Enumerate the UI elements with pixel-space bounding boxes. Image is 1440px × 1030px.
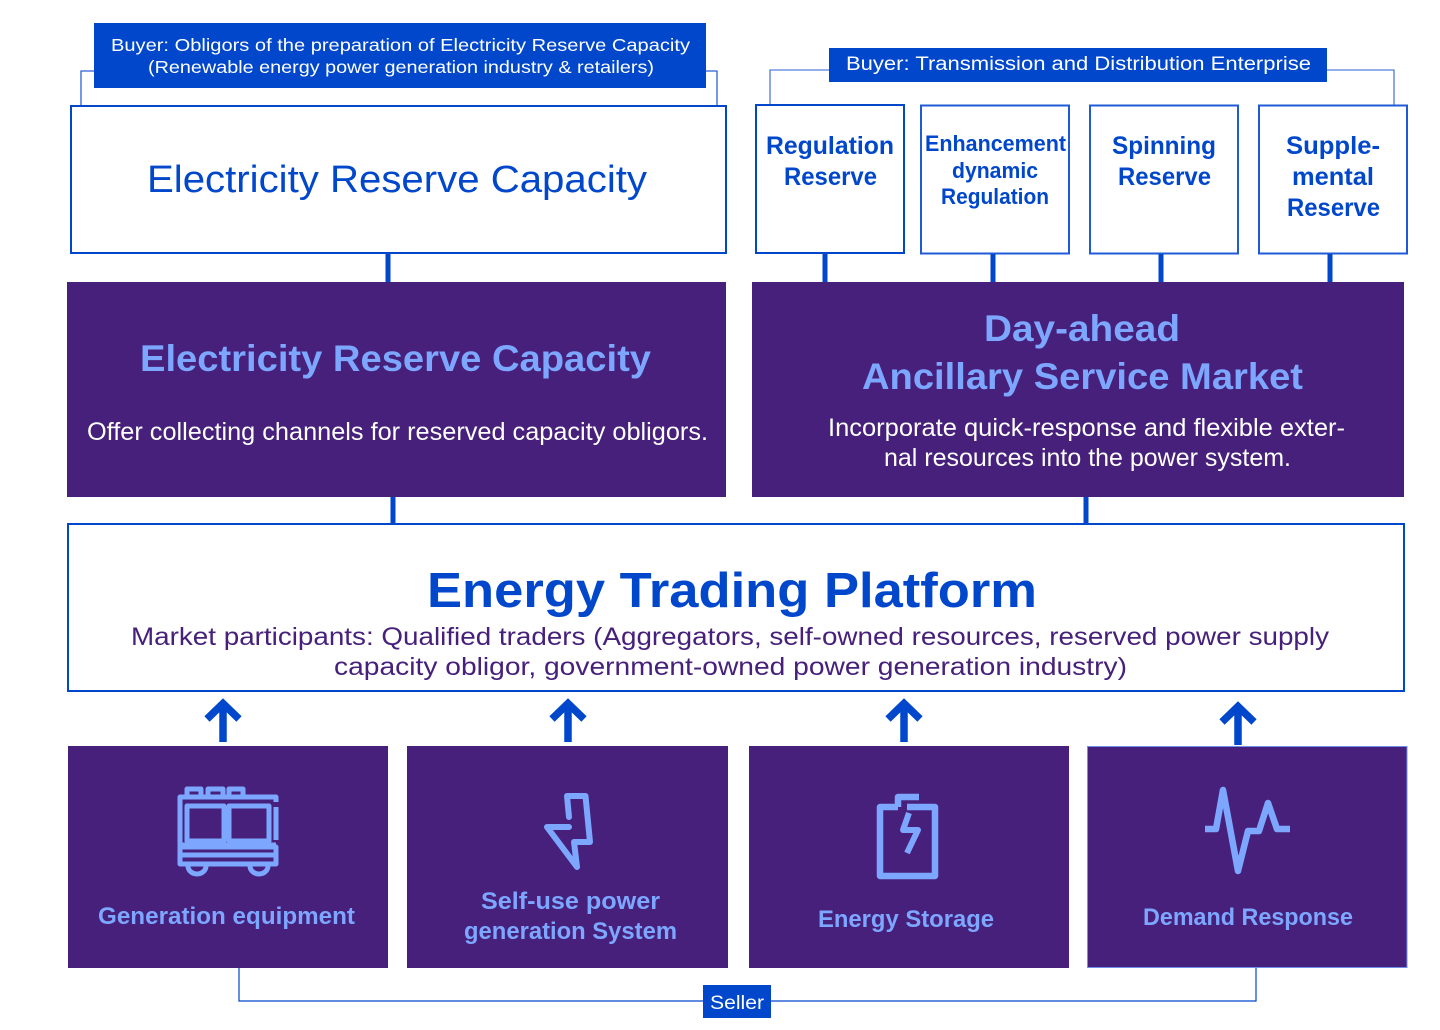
box: spinning reserve: Spinning: [1112, 132, 1216, 160]
box: enhancement dynamic regulation: Enhancement: [925, 131, 1067, 156]
box: enhancement dynamic regulation: Regulation: [941, 184, 1049, 209]
arrow: self-use system up: [552, 704, 584, 742]
connector: right buyer bracket: [770, 70, 1394, 105]
icon: generator: [180, 789, 276, 874]
connector: seller bracket: [239, 968, 1256, 1001]
box: enhancement dynamic regulation: dynamic: [952, 158, 1038, 183]
icon: pulse: [1205, 790, 1290, 871]
arrow: generation equipment up: [207, 704, 239, 742]
panel: self-use power generation system: generation System: [464, 918, 677, 945]
panel: generation equipment: Generation equipment: [98, 903, 355, 930]
panel: electricity reserve capacity outline box: [71, 106, 726, 253]
panel: day-ahead ancillary service market: Incorporate quick-response and flexible exter-: [828, 414, 1345, 442]
panel: energy trading platform: capacity obligor, government-owned power generation industry): [334, 653, 1127, 681]
panel: day-ahead ancillary service market: Ancillary Service Market: [862, 356, 1303, 397]
connectors: vertical stems between tiers: [386, 254, 1332, 524]
seller label: Seller: [710, 993, 765, 1014]
panel: electricity reserve capacity market: Offer collecting channels for reserved capacity obligors.: [87, 418, 708, 446]
panel: self-use power generation system: Self-use power: [481, 888, 660, 915]
buyer label: transmission and distribution: [829, 48, 1327, 82]
panel: day-ahead ancillary service market: nal resources into the power system.: [884, 444, 1291, 472]
panel: electricity reserve capacity market: [67, 282, 726, 497]
arrow: energy storage up: [888, 704, 920, 742]
arrow: demand response up: [1222, 706, 1254, 745]
box: regulation reserve: Reserve: [784, 163, 877, 191]
panel: demand response: Demand Response: [1143, 904, 1353, 931]
icon: battery: [880, 797, 935, 876]
buyer label: transmission and distribution: Buyer: Transmission and Distribution Enterprise: [846, 54, 1311, 75]
buyer label: obligors: (Renewable energy power generation industry & retailers): [148, 57, 654, 77]
panel: energy trading platform: [68, 524, 1404, 691]
panel: energy trading platform: Market participants: Qualified traders (Aggregators, self-owned resources, reserved power supply: [131, 623, 1330, 651]
box: supplemental reserve: mental: [1292, 163, 1374, 191]
panel: generation equipment: [68, 746, 388, 968]
panel: energy storage: [749, 746, 1069, 968]
box: spinning reserve: Reserve: [1118, 163, 1211, 191]
panel: energy storage: Energy Storage: [818, 906, 994, 933]
box: supplemental reserve: [1259, 106, 1407, 254]
connector: left buyer bracket: [81, 71, 717, 106]
box: regulation reserve: [756, 105, 904, 253]
buyer label: obligors: [94, 23, 706, 88]
panel: day-ahead ancillary service market: [752, 282, 1404, 497]
box: regulation reserve: Regulation: [766, 132, 894, 160]
box: enhancement dynamic regulation: [921, 106, 1069, 254]
panel: electricity reserve capacity market: Electricity Reserve Capacity: [140, 338, 651, 379]
panel: self-use power generation system: [407, 746, 728, 968]
panel: energy trading platform: Energy Trading Platform: [427, 564, 1037, 618]
panel: electricity reserve capacity outline box: Electricity Reserve Capacity: [147, 159, 647, 201]
buyer label: obligors: Buyer: Obligors of the preparation of Electricity Reserve Capacity: [111, 35, 690, 55]
seller label: [703, 985, 771, 1018]
box: supplemental reserve: Reserve: [1287, 194, 1380, 222]
box: spinning reserve: [1090, 106, 1238, 254]
icon: lightning bolt: [547, 796, 590, 867]
panel: demand response: [1088, 746, 1407, 968]
box: supplemental reserve: Supple-: [1286, 132, 1380, 160]
panel: day-ahead ancillary service market: Day-ahead: [984, 308, 1180, 349]
